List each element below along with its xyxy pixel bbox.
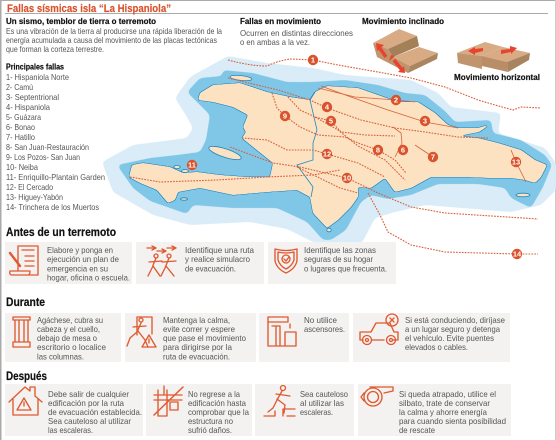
small islands — [174, 74, 530, 232]
list: main faults: 3- Septentrional — [6, 92, 59, 102]
panel: before, emergency plan: emergencia en su — [47, 264, 108, 274]
panel: during, no elevators: ascensores. — [304, 324, 345, 334]
panel: after, careful on stairs: Sea cauteloso — [300, 389, 348, 399]
list: main faults — [6, 62, 105, 212]
panel: after, careful on stairs — [255, 384, 354, 436]
panel: during, stay calm: para dirigirse por la — [163, 342, 232, 352]
panel: after, do not return — [146, 384, 252, 436]
panel: during, driving: el vehículo. Evite puentes — [405, 333, 494, 343]
panel: during, driving — [353, 313, 510, 362]
list: main faults: Principales fallas — [6, 62, 64, 72]
panel: after, whistle: silbato, trate de conservar — [399, 398, 490, 408]
text block: definition of earthquake: Un sismo, temblor de tierra o terremoto — [6, 16, 156, 26]
heading: during: Durante — [6, 297, 45, 309]
panel: before, emergency plan: hogar, oficina o escuela. — [47, 272, 130, 282]
panel: before, evacuation route: y realice simulacro — [185, 254, 250, 264]
panel: after, leave building: de evacuación establecida. — [48, 407, 142, 417]
heading: before: Antes de un terremoto — [6, 227, 116, 239]
panel: during, stay calm: evite correr y espere — [163, 324, 235, 334]
list: main faults: 12- El Cercado — [6, 182, 53, 192]
panel: during, take cover: cabeza y el cuello, — [37, 324, 100, 334]
panel: during, no elevators: No utilice — [304, 315, 337, 325]
list: main faults: 5- Guázara — [6, 112, 41, 122]
panel: after, do not return: estructura no — [188, 416, 233, 426]
icon: elevator with people — [268, 317, 296, 346]
panel: during, take cover: Agáchese, cubra su — [37, 315, 103, 325]
panel: before, evacuation route — [136, 242, 264, 284]
panel: during, stay calm — [125, 313, 256, 362]
diagram: inclined movement: Movimiento inclinado — [362, 16, 444, 26]
panel: after, do not return: sufrió daños. — [188, 425, 232, 435]
panel: during, stay calm: ruta de evacuación. — [163, 352, 230, 362]
panel: during, take cover: debajo de mesa o — [37, 333, 97, 343]
list: main faults: 1- Hispaniola Norte — [6, 72, 69, 82]
panel: after, whistle: la calma y ahorre energía — [399, 407, 487, 417]
panel: during, no elevators — [259, 313, 349, 362]
panel: during, take cover: las columnas. — [37, 352, 84, 362]
fault number markers: 6 — [401, 146, 405, 155]
fault lines — [130, 59, 541, 254]
panel: after, whistle: de rescate — [399, 425, 435, 435]
panel: before, safe zones: Identifique las zonas — [304, 245, 376, 255]
text block: faults in movement — [240, 16, 353, 47]
panel: after, careful on stairs: escaleras. — [300, 407, 333, 417]
icon: column — [13, 317, 30, 347]
panel: before, emergency plan: Elabore y ponga en — [47, 245, 113, 255]
fault number markers: 9 — [283, 112, 287, 121]
list: main faults: 6- Bonao — [6, 122, 35, 132]
panel: after, leave building: edificación por la ruta — [48, 398, 124, 408]
fault number markers: 10 — [343, 174, 351, 183]
icon: person on stairs — [264, 386, 295, 416]
fault number markers: 5 — [329, 117, 333, 126]
text block: definition of earthquake: energía acumulada a causa del movimiento de las placas tectónicas — [6, 35, 217, 45]
panel: after, careful on stairs: al utilizar las — [300, 398, 344, 408]
panel: after, leave building: las escaleras. — [48, 425, 93, 435]
panel: after, do not return: comprobar que la — [188, 407, 249, 417]
list: main faults: 2- Camú — [6, 82, 33, 92]
icon: checklist and pencil — [10, 246, 38, 275]
panel: before, emergency plan — [5, 242, 132, 284]
title: Fallas sísmicas isla “La Hispaniola” — [7, 3, 171, 15]
icon: crossed out damaged building — [154, 386, 183, 416]
panel: during, take cover: escritorio o localice — [37, 342, 106, 352]
panel: after, whistle: Si queda atrapado, utilice el — [399, 389, 496, 399]
map of Hispaniola — [102, 55, 556, 259]
icon: person at exit and warning triangle — [127, 317, 156, 347]
panel: during, driving: a un lugar seguro y detenga — [405, 324, 500, 334]
list: main faults: 11- Enriquillo-Plantain Garden — [6, 172, 105, 182]
list: main faults: 14- Trinchera de los Muertos — [6, 202, 99, 212]
fault number markers: 14 — [513, 250, 522, 259]
panel: after, do not return: No regrese a la — [188, 389, 240, 399]
icon: shield — [275, 249, 297, 273]
panel: during, take cover — [5, 313, 121, 362]
fault number markers: 3 — [423, 117, 427, 126]
panel: before, safe zones: seguras de su hogar — [304, 254, 373, 264]
text block: faults in movement: o en ambas a la vez. — [240, 37, 310, 47]
panel: before, safe zones — [268, 242, 396, 284]
panel: before, evacuation route: Identifique una ruta — [185, 245, 254, 255]
list: main faults: 9- Los Pozos- San Juan — [6, 152, 80, 162]
fault number markers: 7 — [431, 153, 435, 162]
fault number markers: 11 — [188, 161, 196, 170]
panel: after, leave building — [5, 384, 143, 436]
panel: during, driving: Si está conduciendo, diríjase — [405, 315, 505, 325]
list: main faults: 10- Neiba — [6, 162, 38, 172]
list: main faults: 4- Hispaniola — [6, 102, 50, 112]
fault number markers: 1 — [311, 56, 315, 65]
icon: people running with arrows — [147, 246, 176, 276]
icon: house with warning — [9, 387, 42, 415]
panel: during, stay calm: Mantenga la calma, — [163, 315, 230, 325]
panel: after, leave building: Debe salir de cualquier — [48, 389, 129, 399]
land — [129, 83, 547, 228]
text block: faults in movement: Fallas en movimiento — [240, 16, 321, 26]
panel: before, safe zones: o lugares que frecuenta. — [304, 264, 387, 274]
panel: before, evacuation route: de evacuación. — [185, 264, 236, 274]
list: main faults: 7- Hatillo — [6, 132, 35, 142]
fault number markers: 8 — [376, 146, 380, 155]
text block: faults in movement: Ocurren en distintas direcciones — [240, 28, 353, 38]
fault number markers: 13 — [512, 158, 520, 167]
diagram: inclined movement — [362, 16, 444, 73]
list: main faults: 13- Higuey-Yabón — [6, 192, 63, 202]
diagram: horizontal movement — [454, 42, 540, 82]
fault number markers: 2 — [394, 96, 398, 105]
list: main faults: 8- San Juan-Restauración — [6, 142, 89, 152]
text block: definition of earthquake: Es una vibración de la tierra al producirse una rápida liberación de la — [6, 26, 222, 36]
heading: after: Después — [6, 371, 47, 383]
panel: after, whistle — [358, 384, 511, 436]
text block: definition of earthquake — [6, 16, 222, 54]
icon: car with stop sign — [360, 314, 398, 344]
diagram: horizontal movement: Movimiento horizontal — [454, 72, 540, 82]
panel: after, leave building: Sea cauteloso al utilizar — [48, 416, 131, 426]
fault number markers: 4 — [325, 103, 330, 112]
text block: definition of earthquake: que forman la corteza terrestre. — [6, 44, 104, 54]
panel: after, do not return: edificación hasta — [188, 398, 246, 408]
panel: during, driving: elevados o cables. — [405, 342, 468, 352]
fault number markers: 12 — [323, 150, 331, 159]
icon: whistle — [361, 387, 393, 406]
panel: during, stay calm: que pase el movimiento — [163, 333, 246, 343]
panel: after, whistle: para cuando sienta posibilidad — [399, 416, 506, 426]
panel: before, emergency plan: ejecución un plan de — [47, 254, 119, 264]
fault number markers — [187, 55, 522, 259]
